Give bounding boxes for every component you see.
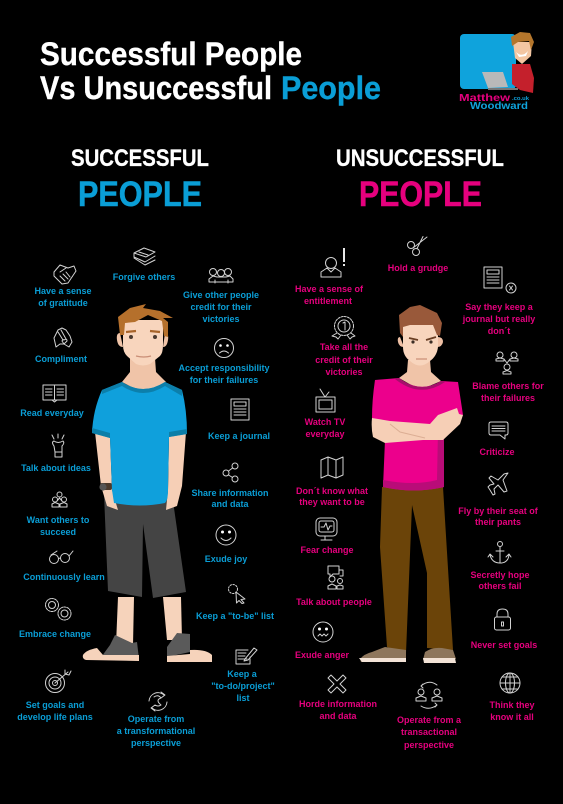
item: have a sense of gratitude: of gratitude [38,298,88,308]
item: take all the credit: victories [325,367,363,377]
item: say they keep a journal: journal but really [462,314,535,324]
item: transformational perspective: a transformational [117,726,195,736]
item: keep a to-be list: Keep a "to-be" list [196,611,274,621]
item: think they know it all: know it all [490,712,534,722]
item: want others to succeed: Want others to [27,515,90,525]
item: exude anger: Exude anger [295,650,349,660]
item: set goals: develop life plans [17,712,93,722]
heading: successful people: SUCCESSFUL [71,145,209,172]
item: exude anger [295,622,349,660]
item: criticize: Criticize [479,447,515,457]
heading: unsuccessful people [336,145,504,214]
item: keep a to-be list [196,584,274,621]
item: think they know it all: Think they [489,700,535,710]
item: sense of entitlement: entitlement [304,296,352,306]
item: transactional perspective [397,682,462,750]
item: read everyday: Read everyday [20,408,84,418]
item: never set goals: Never set goals [471,640,537,650]
item: share information: and data [211,499,249,509]
item: transformational perspective: perspective [131,738,181,748]
logo: Matthew Woodward: Woodward [470,101,528,112]
item: keep a to-do list: "to-do/project" [211,681,275,691]
item: keep a journal: Keep a journal [208,431,270,441]
item: read everyday [20,385,84,418]
item: keep a journal [208,399,270,441]
item: give credit [183,268,259,324]
item: fly by seat of pants [458,473,539,527]
item: exude joy: Exude joy [205,554,247,564]
item: want others to succeed [27,492,90,537]
item: horde information: Horde information [299,699,377,709]
item: keep a to-do list: Keep a [227,669,258,679]
item: give credit: credit for their [190,302,252,312]
item: talk about ideas [21,434,91,473]
item: blame others [472,352,544,403]
item: never set goals [471,609,537,650]
heading: successful people [71,145,209,214]
item: say they keep a journal: Say they keep a [465,302,534,312]
item: watch TV: everyday [305,429,345,439]
item: secretly hope others fail: Secretly hope [470,570,530,580]
item: set goals: Set goals and [26,700,84,710]
item: don't know what they want [296,457,368,507]
item: blame others: their failures [481,393,535,403]
item: transactional perspective: Operate from a [397,715,462,725]
item: accept responsibility [178,338,270,385]
item: embrace change [19,598,91,639]
item: secretly hope others fail [470,542,530,591]
item: take all the credit: Take all the [320,342,368,352]
item: sense of entitlement [295,248,364,306]
title: People [281,70,381,106]
logo: Matthew Woodward [459,32,534,112]
item: embrace change: Embrace change [19,629,91,639]
item: don't know what they want: Don´t know what [296,486,368,496]
item: continuously learn: Continuously learn [23,572,105,582]
item: secretly hope others fail: others fail [478,581,522,591]
item: fear change: Fear change [300,545,354,555]
item: horde information: and data [319,711,357,721]
item: give credit: victories [202,314,240,324]
item: want others to succeed: succeed [40,527,76,537]
item: don't know what they want: they want to be [299,497,365,507]
item: talk about people [296,566,372,607]
item: think they know it all [489,673,535,722]
character: unsuccessful man [359,305,463,663]
item: accept responsibility: Accept responsibility [178,363,270,373]
item: take all the credit [315,316,373,377]
title [40,36,381,106]
item: share information [191,463,269,509]
item: fear change [300,518,354,555]
item: keep a to-do list [211,648,275,703]
item: say they keep a journal [462,267,535,336]
character: successful man [83,304,212,662]
item: exude joy [205,525,247,564]
item: horde information [299,675,377,721]
item: transactional perspective: transactional [401,727,457,737]
item: set goals [17,670,93,722]
item: fly by seat of pants: their pants [475,517,521,527]
item: sense of entitlement: Have a sense of [295,284,364,294]
item: transactional perspective: perspective [404,740,454,750]
item: continuously learn [23,551,105,582]
item: transformational perspective: Operate from [128,714,184,724]
title: Successful People [40,36,302,72]
item: talk about people: Talk about people [296,597,372,607]
item: accept responsibility: for their failures [190,375,258,385]
item: forgive others: Forgive others [113,272,175,282]
item: talk about ideas: Talk about ideas [21,463,91,473]
item: forgive others [113,248,175,282]
title: Vs Unsuccessful [40,70,272,106]
item: hold a grudge: Hold a grudge [388,263,448,273]
heading: unsuccessful people: UNSUCCESSFUL [336,145,504,172]
item: have a sense of gratitude [34,265,92,308]
heading: successful people: PEOPLE [78,175,202,214]
item: compliment: Compliment [35,354,87,364]
item: fly by seat of pants: Fly by their seat of [458,506,539,516]
item: give credit: Give other people [183,290,259,300]
item: watch TV [305,389,345,439]
item: compliment [35,328,87,364]
item: take all the credit: credit of their [315,355,373,365]
logo: Matthew Woodward: .co.uk [512,96,530,102]
item: blame others: Blame others for [472,381,544,391]
item: watch TV: Watch TV [305,417,345,427]
item: have a sense of gratitude: Have a sense [34,286,92,296]
logo: Matthew Woodward: Matthew [459,93,510,104]
heading: unsuccessful people: PEOPLE [359,175,482,214]
item: transformational perspective [117,692,195,748]
item: share information: Share information [191,488,269,498]
item: hold a grudge [388,236,448,273]
item: criticize [479,422,515,457]
item: keep a to-do list: list [236,693,250,703]
item: say they keep a journal: don´t [488,326,510,336]
